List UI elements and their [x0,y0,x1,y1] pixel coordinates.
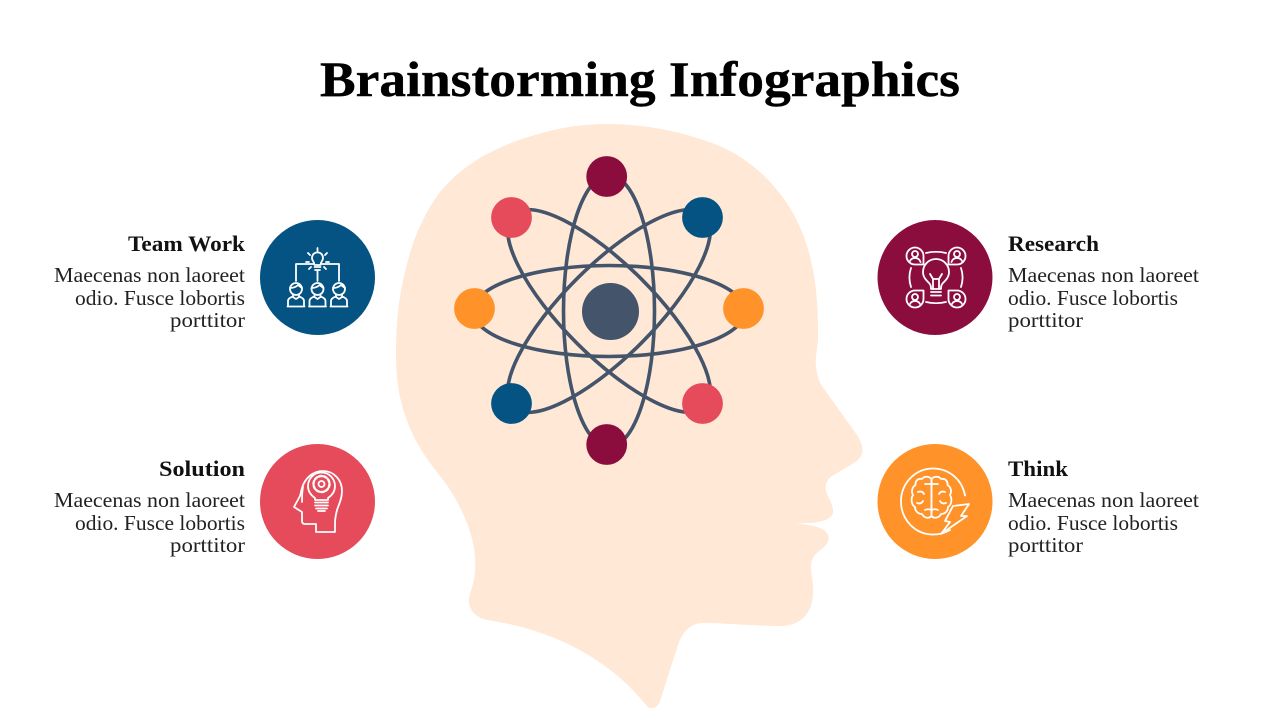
text block: research: porttitor [1008,308,1083,332]
text block: team work: porttitor [170,308,245,332]
text block: solution [54,488,245,557]
text block: think: Maecenas non laoreet [1008,488,1199,512]
text block: team work: odio. Fusce lobortis [75,286,245,310]
text block: think: porttitor [1008,533,1083,557]
icon: research [878,220,992,335]
text block: solution: porttitor [170,533,245,557]
text block: research [1008,263,1199,332]
panel: research [878,220,1199,335]
panel: think [878,444,1199,559]
icon: think [878,444,992,559]
head silhouette [396,124,862,708]
heading: solution: Solution [159,456,245,481]
atom electrons [454,156,764,465]
text block: research: odio. Fusce lobortis [1008,286,1178,310]
title: Brainstorming Infographics [320,51,960,107]
text block: think [1008,488,1199,557]
heading: think: Think [1008,456,1069,481]
panel: solution [54,444,375,559]
text block: team work: Maecenas non laoreet [54,263,245,287]
heading: team work: Team Work [128,231,246,256]
atom diagram [454,156,764,465]
text block: solution: odio. Fusce lobortis [75,511,245,535]
atom orbits [473,175,745,447]
text block: team work [54,263,245,332]
text block: research: Maecenas non laoreet [1008,263,1199,287]
text block: think: odio. Fusce lobortis [1008,511,1178,535]
text block: solution: Maecenas non laoreet [54,488,245,512]
heading: research: Research [1008,231,1099,256]
panel: team work [54,220,375,335]
icon: team work [260,220,375,335]
icon: solution [260,444,375,559]
atom nucleus [582,283,639,340]
